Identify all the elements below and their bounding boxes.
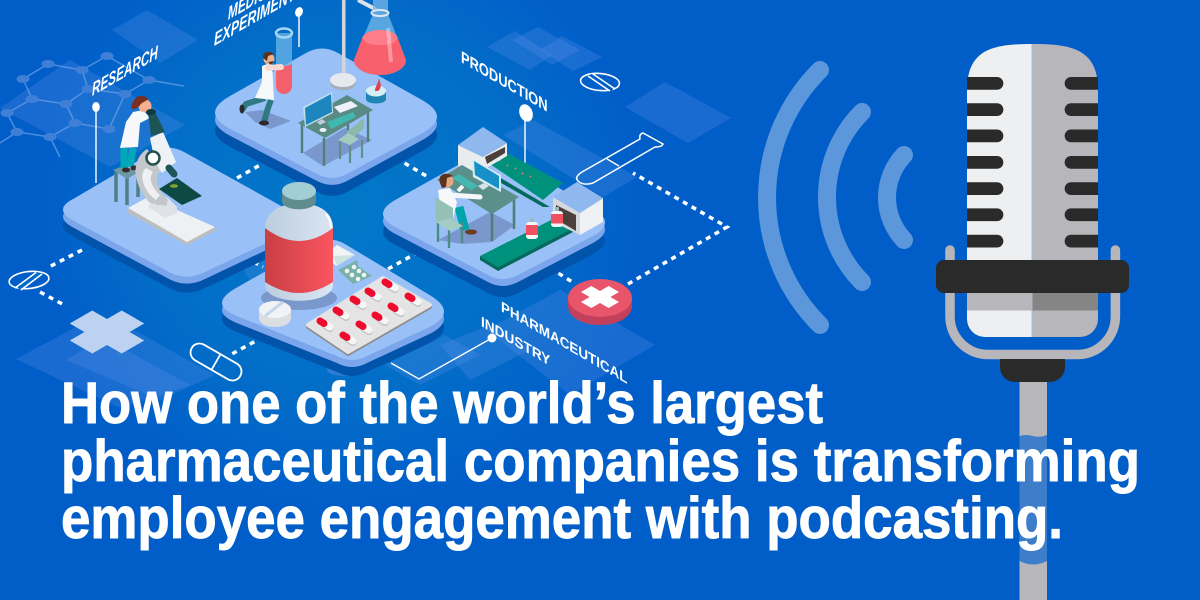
man in lab coat — [240, 52, 281, 126]
illustration: medicine bottle and blister pack — [259, 182, 430, 354]
molecule network — [0, 52, 184, 157]
microphone — [936, 44, 1129, 600]
desk shadow — [303, 128, 372, 166]
microscope arm — [136, 149, 168, 206]
scientist — [120, 97, 152, 172]
stem — [1020, 380, 1047, 600]
label: production with pin — [461, 48, 548, 165]
label: pharmaceutical industry with connector: INDUSTRY — [481, 314, 551, 370]
label: production with pin: PRODUCTION — [461, 48, 548, 116]
chair — [435, 197, 463, 248]
panel: medical experiments platform — [215, 48, 437, 196]
panel: production platform — [383, 151, 605, 297]
band — [936, 260, 1129, 293]
icon: outline test tube — [577, 133, 663, 184]
label: pharmaceutical industry with connector: PHARMACEUTICAL — [501, 299, 628, 388]
background glow — [0, 0, 760, 520]
microscope body — [146, 109, 176, 174]
desk shadow — [438, 212, 515, 244]
upper conveyor — [482, 153, 563, 207]
body right — [1032, 44, 1098, 337]
headline: How one of the world’s largest — [61, 371, 823, 436]
illustration: scientist with test tube and desk — [240, 0, 406, 166]
label: research with pin — [92, 41, 158, 183]
icon: red cross button — [568, 279, 632, 325]
desk — [437, 159, 519, 241]
icon: outline pill left — [8, 269, 50, 291]
illustration: scientist at microscope — [113, 97, 215, 245]
stand and flask — [330, 0, 406, 90]
capsules — [320, 282, 418, 342]
illustration: production line — [435, 127, 603, 271]
icon: translucent cross — [55, 302, 159, 362]
background diamonds — [0, 10, 731, 408]
decorative arc under pharmaceutical platform — [327, 364, 363, 376]
sound waves — [767, 70, 904, 325]
dotted connectors — [40, 158, 727, 355]
icon: outline capsule — [187, 340, 245, 384]
headline: employee engagement with podcasting. — [61, 486, 1063, 551]
panel: research platform — [63, 148, 301, 293]
holder — [950, 250, 1115, 355]
stool — [113, 165, 138, 205]
headline — [61, 371, 1140, 551]
shadow of scientist — [245, 110, 291, 129]
lower conveyor — [480, 217, 575, 271]
microscope base — [128, 193, 215, 245]
oven right — [553, 182, 603, 235]
label: research with pin: RESEARCH — [92, 41, 158, 100]
band shadow tones — [967, 290, 1098, 310]
bottle — [261, 182, 337, 310]
jars — [526, 207, 563, 239]
oven left — [458, 127, 507, 176]
panel: pharmaceutical platform — [222, 240, 444, 376]
foot — [1000, 359, 1065, 382]
worker — [438, 174, 480, 235]
burner with flame — [366, 78, 386, 104]
body left — [967, 44, 1032, 337]
giant test tube — [276, 28, 292, 94]
centre line — [1031, 44, 1033, 337]
microscope stage — [159, 178, 202, 205]
chair — [338, 118, 364, 163]
pill box — [332, 245, 372, 284]
label: pharmaceutical industry with connector — [391, 299, 628, 388]
blister pack — [308, 278, 430, 354]
icon: outline pill right — [580, 72, 620, 92]
round tablet — [259, 301, 291, 327]
desk — [298, 92, 373, 166]
grille slits — [967, 77, 1098, 248]
